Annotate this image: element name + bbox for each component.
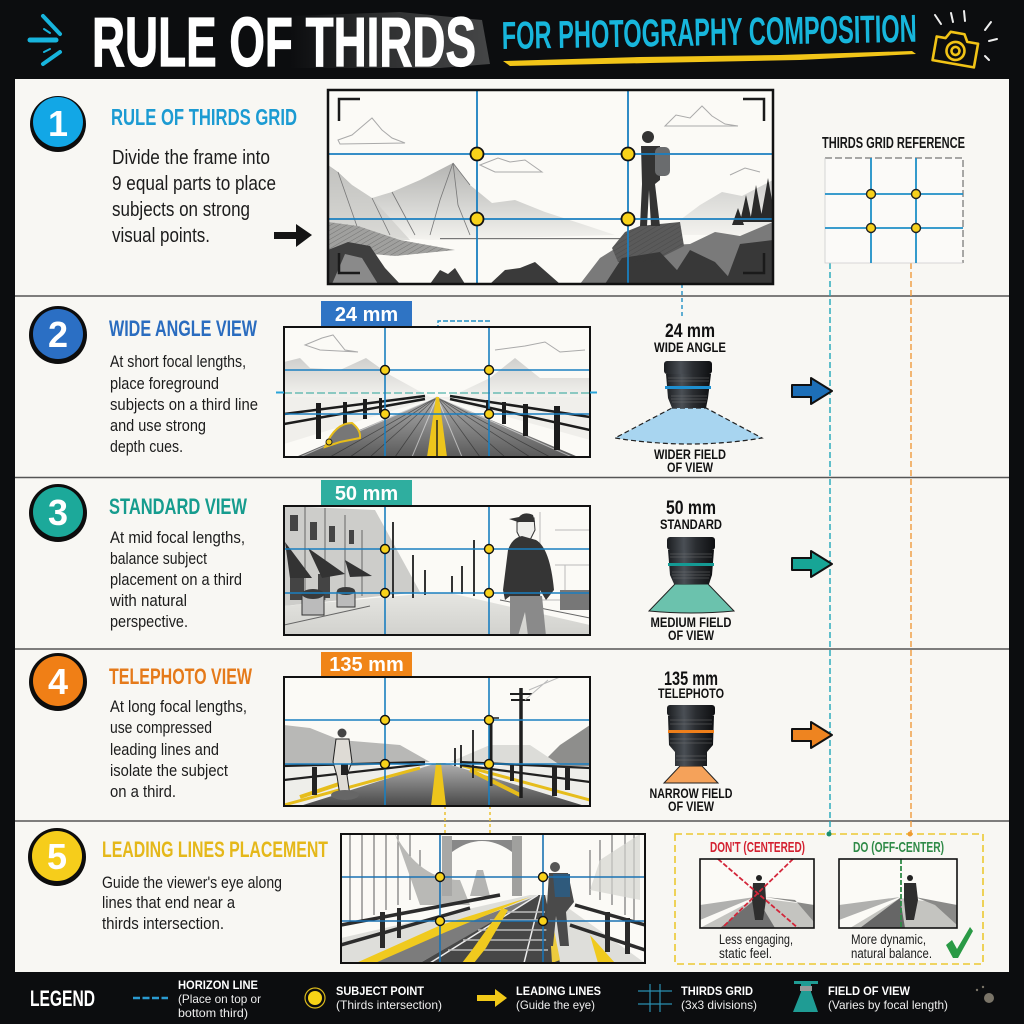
legend: leading lines bbox=[477, 984, 601, 1012]
panel: step 4 telephoto view bbox=[29, 652, 832, 814]
photo: telephoto road bbox=[284, 677, 590, 806]
panel: step 1 rule of thirds grid bbox=[30, 90, 965, 284]
50 mm lens label bbox=[660, 498, 722, 532]
step 1 badge bbox=[30, 96, 86, 152]
do heading: DO (OFF-CENTER) bbox=[853, 839, 944, 856]
24 mm lens label: 24 mm bbox=[665, 321, 715, 342]
legend: leading lines: (Guide the eye) bbox=[516, 998, 595, 1012]
step 4 text bbox=[110, 697, 247, 801]
step 5 text: lines that end near a bbox=[102, 893, 235, 912]
arrow teal bbox=[792, 551, 832, 577]
step 3 text: perspective. bbox=[110, 612, 188, 631]
135 mm lens label bbox=[658, 669, 724, 701]
don't caption: static feel. bbox=[719, 946, 772, 961]
camera rays bbox=[935, 11, 997, 60]
icon: lens 50 mm bbox=[667, 537, 715, 584]
field of view label wide bbox=[654, 447, 726, 475]
135 mm tag bbox=[321, 652, 412, 678]
do caption: natural balance. bbox=[851, 946, 932, 961]
field of view label medium bbox=[650, 615, 732, 643]
legend title: LEGEND bbox=[30, 986, 95, 1011]
step 4 text: At long focal lengths, bbox=[110, 697, 247, 716]
step 1 text: Divide the frame into bbox=[112, 147, 270, 169]
step 3 heading: STANDARD VIEW bbox=[109, 494, 247, 519]
legend: thirds grid: THIRDS GRID bbox=[681, 984, 753, 998]
connector lines bbox=[438, 263, 911, 834]
step 2 text: At short focal lengths, bbox=[110, 352, 246, 371]
50 mm tag bbox=[321, 480, 412, 507]
24 mm tag bbox=[321, 301, 412, 328]
thirds intersections bbox=[470, 148, 634, 226]
135 mm lens label: TELEPHOTO bbox=[658, 686, 724, 701]
step 3 text: with natural bbox=[109, 591, 187, 610]
step 1 badge: 1 bbox=[48, 103, 68, 144]
hiker bbox=[640, 131, 670, 226]
arrow to photo bbox=[274, 224, 312, 247]
arrow blue bbox=[792, 378, 832, 404]
legend: horizon line: bottom third) bbox=[178, 1006, 248, 1020]
step 4 heading: TELEPHOTO VIEW bbox=[109, 664, 252, 689]
50 mm lens label: STANDARD bbox=[660, 517, 722, 532]
step 3 text bbox=[109, 528, 245, 631]
24 mm lens label bbox=[654, 321, 726, 355]
legend: subject point: SUBJECT POINT bbox=[336, 984, 425, 998]
title: RULE OF THIRDS bbox=[92, 3, 476, 81]
icon: camera with rays bbox=[933, 30, 979, 67]
step 5 heading: LEADING LINES PLACEMENT bbox=[102, 837, 328, 862]
field of view label narrow bbox=[650, 786, 733, 814]
legend: horizon line: (Place on top or bbox=[178, 992, 261, 1006]
50 mm lens label: 50 mm bbox=[666, 498, 716, 519]
field of view label medium: MEDIUM FIELD bbox=[650, 615, 732, 630]
photo: street with man bbox=[284, 506, 590, 640]
field of view label wide: OF VIEW bbox=[667, 460, 713, 475]
step 2 text bbox=[110, 352, 258, 456]
field of view wide bbox=[615, 408, 762, 444]
arrow orange bbox=[792, 722, 832, 748]
step 4 badge bbox=[29, 653, 87, 711]
24 mm tag: 24 mm bbox=[335, 304, 398, 326]
legend: horizon line: HORIZON LINE bbox=[178, 978, 258, 992]
icon: lens 24 mm bbox=[664, 361, 712, 408]
24 mm lens label: WIDE ANGLE bbox=[654, 340, 726, 355]
legend: field of view bbox=[793, 981, 948, 1012]
step 4 text: isolate the subject bbox=[110, 761, 228, 780]
step 3 badge: 3 bbox=[48, 492, 68, 533]
photo: hiker at mountain lake bbox=[328, 90, 776, 284]
don't heading: DON'T (CENTERED) bbox=[710, 839, 805, 856]
step 1 heading: RULE OF THIRDS GRID bbox=[111, 104, 297, 130]
step 1 text: 9 equal parts to place bbox=[112, 173, 276, 195]
thirds grid reference: THIRDS GRID REFERENCE bbox=[822, 135, 965, 152]
viewfinder corners bbox=[339, 99, 764, 273]
photo: bridge with hiker bbox=[341, 834, 645, 963]
legend: field of view: (Varies by focal length) bbox=[828, 998, 948, 1012]
step 1 text: visual points. bbox=[112, 225, 210, 247]
step 2 badge bbox=[29, 306, 87, 364]
legend: subject point bbox=[305, 984, 442, 1012]
legend: thirds grid bbox=[638, 984, 757, 1012]
field of view label narrow: OF VIEW bbox=[668, 799, 714, 814]
step 3 text: At mid focal lengths, bbox=[110, 528, 245, 547]
field of view label wide: WIDER FIELD bbox=[654, 447, 726, 462]
legend: horizon line bbox=[133, 978, 261, 1020]
step 2 heading: WIDE ANGLE VIEW bbox=[109, 316, 257, 341]
subtitle yellow brush underline bbox=[503, 51, 916, 66]
don't photo bbox=[700, 859, 814, 928]
step 3 text: placement on a third bbox=[110, 570, 242, 589]
legend: leading lines: LEADING LINES bbox=[516, 984, 601, 998]
decorative mark bbox=[976, 986, 994, 1003]
thirds grid reference bbox=[822, 135, 965, 263]
step 2 text: subjects on a third line bbox=[110, 395, 258, 414]
legend: thirds grid: (3x3 divisions) bbox=[681, 998, 757, 1012]
panel: step 2 wide angle view bbox=[29, 301, 832, 475]
icon: lens 135 mm bbox=[667, 705, 715, 766]
do caption bbox=[851, 932, 932, 961]
legend: subject point: (Thirds intersection) bbox=[336, 998, 442, 1012]
step 2 badge: 2 bbox=[48, 314, 68, 355]
step 1 text bbox=[112, 147, 276, 247]
step 4 text: leading lines and bbox=[110, 740, 219, 759]
panel: step 5 leading lines placement bbox=[28, 828, 983, 964]
step 2 text: depth cues. bbox=[110, 437, 183, 456]
don't caption bbox=[719, 932, 793, 961]
step 3 badge bbox=[29, 484, 87, 542]
header bbox=[30, 3, 997, 81]
do photo bbox=[839, 859, 957, 928]
icon: check mark bbox=[946, 927, 973, 958]
step 4 text: on a third. bbox=[110, 782, 176, 801]
step 4 badge: 4 bbox=[48, 661, 68, 702]
step 4 text: use compressed bbox=[110, 718, 212, 737]
step 2 text: place foreground bbox=[110, 374, 219, 393]
step 1 text: subjects on strong bbox=[112, 199, 250, 221]
step 2 text: and use strong bbox=[110, 416, 206, 435]
step 5 text: Guide the viewer's eye along bbox=[102, 873, 282, 892]
field of view label medium: OF VIEW bbox=[668, 628, 714, 643]
step 5 text: thirds intersection. bbox=[102, 914, 224, 933]
do caption: More dynamic, bbox=[851, 932, 926, 947]
title brush backdrop bbox=[290, 12, 490, 68]
grid lines bbox=[328, 90, 773, 284]
step 3 text: balance subject bbox=[110, 549, 207, 568]
135 mm lens label: 135 mm bbox=[664, 669, 718, 690]
do and don't comparison bbox=[675, 832, 983, 964]
field of view narrow bbox=[664, 766, 718, 783]
don't caption: Less engaging, bbox=[719, 932, 793, 947]
legend bar bbox=[30, 978, 994, 1020]
step 5 badge: 5 bbox=[47, 836, 67, 877]
icon: cyan spark left bbox=[30, 16, 60, 64]
panel: step 3 standard view bbox=[29, 480, 832, 643]
step 5 badge bbox=[28, 828, 86, 886]
legend: field of view: FIELD OF VIEW bbox=[828, 984, 911, 998]
135 mm tag: 135 mm bbox=[329, 654, 404, 676]
field of view label narrow: NARROW FIELD bbox=[650, 786, 733, 801]
50 mm tag: 50 mm bbox=[335, 483, 398, 505]
field of view medium bbox=[649, 584, 734, 613]
photo: wide angle road bbox=[276, 327, 597, 470]
step 5 text bbox=[102, 873, 282, 933]
